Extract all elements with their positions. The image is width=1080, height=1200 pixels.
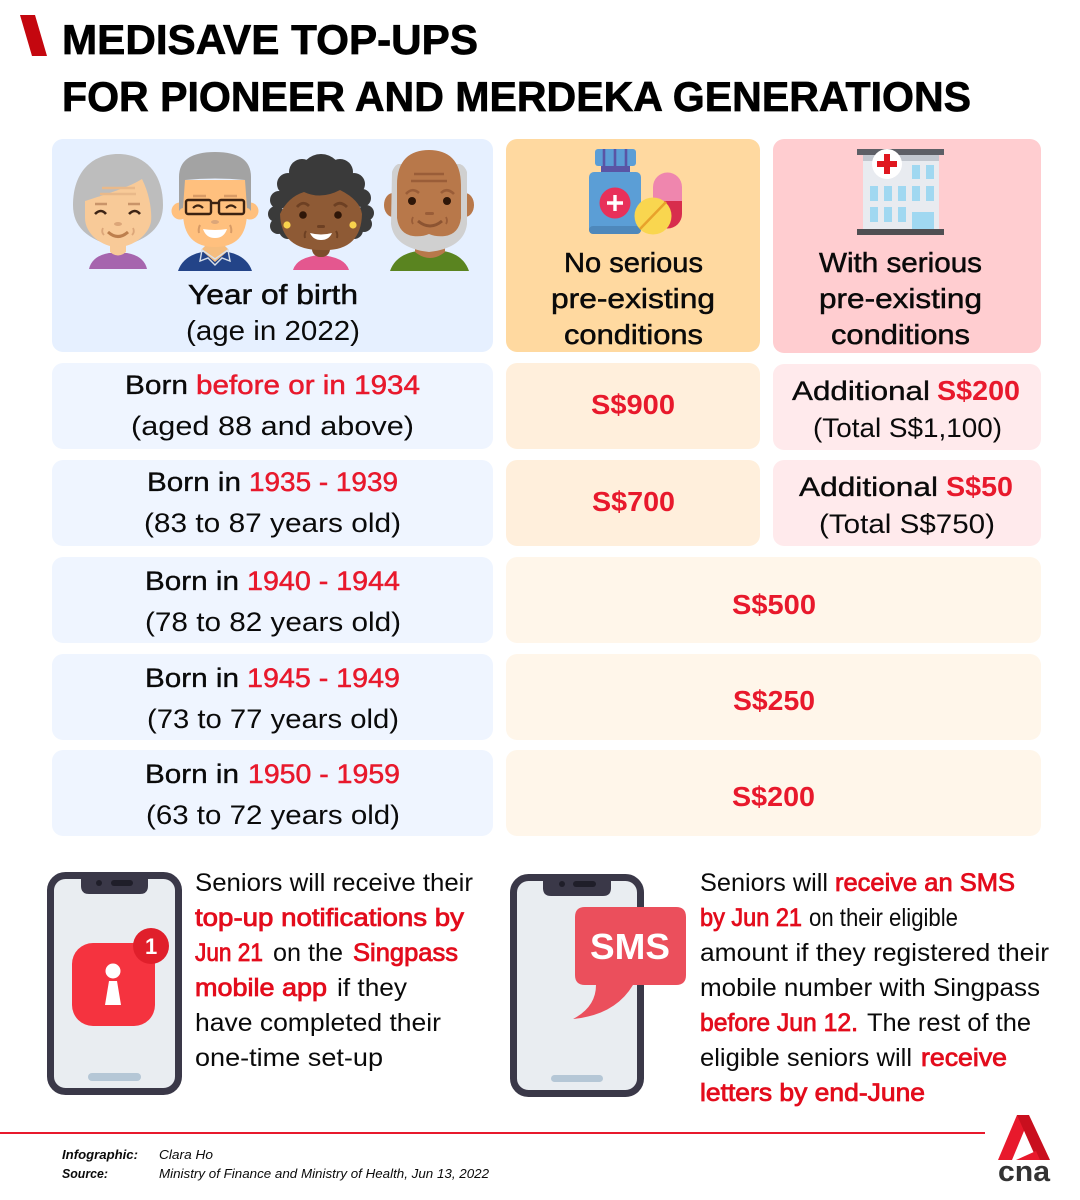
row 5 amount — [506, 750, 1041, 836]
CNA logo: cna — [998, 1156, 1051, 1188]
heading: no serious pre-existing conditions — [551, 247, 715, 350]
text: singpass notification: top-up notifications by — [195, 904, 465, 932]
panel: with serious pre-existing conditions header — [773, 139, 1041, 353]
title: FOR PIONEER AND MERDEKA GENERATIONS — [62, 73, 971, 120]
row 2: born in 1935 - 1939 — [52, 460, 493, 546]
heading: with serious pre-existing conditions: conditions — [831, 319, 970, 350]
row 1 amount: with conditions: (Total S$1,100) — [813, 413, 1002, 443]
row 2 amount: with conditions: Additional — [799, 472, 938, 502]
text: SMS notification: receive an SMS — [835, 869, 1015, 897]
row 2: born in 1935 - 1939: 1935 - 1939 — [249, 467, 398, 497]
text: SMS notification: Seniors will — [700, 869, 828, 897]
text: singpass notification: Jun 21 — [195, 939, 263, 967]
row 5: born in 1950 - 1959 — [52, 750, 493, 836]
heading: no serious pre-existing conditions: conditions — [564, 319, 703, 350]
row 3: born in 1940 - 1944 — [52, 557, 493, 643]
icon: hospital building — [857, 149, 944, 235]
heading: with serious pre-existing conditions: pre-existing — [819, 283, 982, 314]
row 4 amount: S$250 — [733, 685, 815, 716]
text: SMS notification: by Jun 21 — [700, 904, 802, 932]
row 3: born in 1940 - 1944: Born in — [145, 566, 239, 596]
icon: elderly man with beard — [384, 150, 474, 271]
row 4 amount — [506, 654, 1041, 740]
text: SMS notification: amount if they registered their — [700, 939, 1049, 967]
row 3: born in 1940 - 1944: 1940 - 1944 — [247, 566, 400, 596]
row 4: born in 1945 - 1949 — [52, 654, 493, 740]
text: SMS notification: mobile number with Singpass — [700, 974, 1040, 1002]
row 1 amount: no conditions: S$900 — [591, 389, 675, 420]
row 1 amount: with conditions: Additional — [792, 376, 930, 406]
row 3 amount — [506, 557, 1041, 643]
row 3 amount: S$500 — [732, 589, 816, 620]
row 1 amount: with conditions: S$200 — [937, 375, 1020, 406]
text: singpass notification: one-time set-up — [195, 1044, 383, 1072]
row 4: born in 1945 - 1949: 1945 - 1949 — [247, 663, 400, 693]
panel: no serious pre-existing conditions header — [506, 139, 760, 352]
footer credits: Source: — [62, 1167, 108, 1181]
text: singpass notification: Seniors will receive their — [195, 869, 473, 897]
row 5 amount: S$200 — [732, 781, 815, 812]
row 2 amount: with conditions — [773, 460, 1041, 546]
row 1 amount: with conditions — [773, 364, 1041, 450]
icon: phone with notification: 1 — [145, 934, 157, 959]
row 4: born in 1945 - 1949: (73 to 77 years old) — [147, 704, 399, 734]
footer credits: Clara Ho — [159, 1148, 213, 1162]
text: SMS notification: The rest of the — [867, 1009, 1031, 1037]
row 2 amount: with conditions: S$50 — [946, 471, 1013, 502]
row 5: born in 1950 - 1959: Born in — [145, 759, 239, 789]
row 1 amount: no conditions — [506, 363, 760, 449]
row 1: born before or in 1934: before or in 1934 — [196, 370, 420, 400]
icon: elderly woman with grey hair — [73, 154, 163, 269]
row 2 amount: no conditions: S$700 — [592, 486, 675, 517]
text: singpass notification: have completed their — [195, 1009, 441, 1037]
icon: elderly man with glasses — [172, 152, 258, 271]
text: SMS notification: before Jun 12. — [700, 1009, 858, 1037]
text: SMS notification: on their eligible — [809, 904, 958, 932]
heading: with serious pre-existing conditions: With serious — [819, 247, 982, 278]
row 5: born in 1950 - 1959: (63 to 72 years old) — [146, 800, 400, 830]
icon: elderly woman with curly hair — [268, 154, 374, 270]
footer credits — [62, 1148, 489, 1181]
text: SMS notification — [700, 869, 1049, 1107]
row 1: born before or in 1934: (aged 88 and above) — [131, 411, 414, 441]
text: singpass notification: on the — [273, 939, 343, 967]
icon: phone with SMS bubble: SMS — [590, 926, 670, 967]
row 3: born in 1940 - 1944: (78 to 82 years old) — [145, 607, 401, 637]
heading: with serious pre-existing conditions — [819, 247, 982, 350]
icon: phone with notification — [50, 876, 178, 1092]
text: singpass notification: mobile app — [195, 974, 327, 1002]
text: SMS notification: eligible seniors will — [700, 1044, 912, 1072]
CNA logo — [998, 1115, 1051, 1188]
footer credits: Infographic: — [62, 1148, 138, 1162]
heading: no serious pre-existing conditions: No serious — [564, 247, 703, 278]
text: age in 2022: (age in 2022) — [186, 315, 360, 346]
row 2 amount: no conditions — [506, 460, 760, 546]
row 1: born before or in 1934: Born — [125, 370, 188, 400]
icon: phone with SMS bubble — [514, 878, 686, 1094]
row 1: born before or in 1934 — [52, 363, 493, 449]
title — [62, 16, 971, 120]
title accent mark — [20, 15, 47, 56]
panel: year of birth header — [52, 139, 493, 352]
heading: year of birth: Year of birth — [188, 279, 358, 310]
row 4: born in 1945 - 1949: Born in — [145, 663, 239, 693]
heading: no serious pre-existing conditions: pre-existing — [551, 283, 715, 314]
title: MEDISAVE TOP-UPS — [62, 16, 478, 63]
text: singpass notification: if they — [337, 974, 408, 1002]
text: singpass notification: Singpass — [353, 939, 458, 967]
footer credits: Ministry of Finance and Ministry of Health, Jun 13, 2022 — [159, 1167, 489, 1181]
text: singpass notification — [195, 869, 473, 1072]
text: SMS notification: receive — [921, 1044, 1007, 1072]
icon: medicine bottle and pills — [589, 149, 682, 234]
row 2: born in 1935 - 1939: (83 to 87 years old) — [144, 508, 401, 538]
row 2: born in 1935 - 1939: Born in — [147, 467, 241, 497]
row 2 amount: with conditions: (Total S$750) — [819, 509, 995, 539]
row 5: born in 1950 - 1959: 1950 - 1959 — [248, 759, 400, 789]
text: SMS notification: letters by end-June — [700, 1079, 925, 1107]
